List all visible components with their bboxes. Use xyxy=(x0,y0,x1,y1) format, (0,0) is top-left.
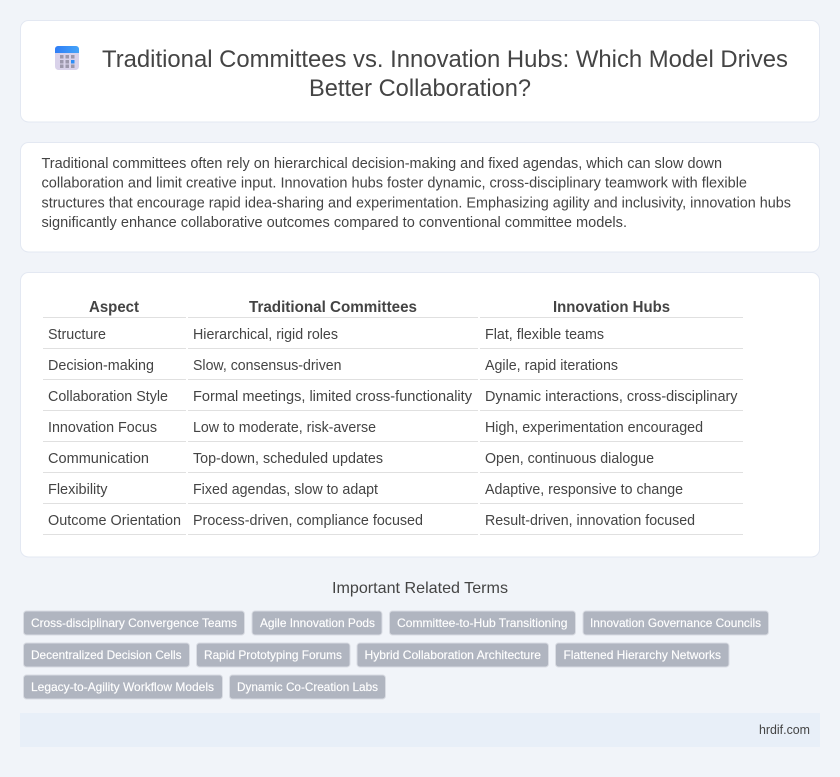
tag xyxy=(196,643,350,667)
tag: Dynamic Co-Creation Labs xyxy=(237,680,378,694)
table header xyxy=(89,299,670,316)
row: structure: Structure xyxy=(48,327,106,343)
table header: Aspect xyxy=(89,299,140,316)
row: decision-making: Slow, consensus-driven xyxy=(193,358,342,374)
tag xyxy=(24,611,244,635)
tag: Rapid Prototyping Forums xyxy=(204,648,342,662)
footer bar xyxy=(20,713,820,747)
tag xyxy=(390,611,576,635)
intro paragraph: structures that encourage rapid idea-sharing and experimentation. Emphasizing agility and inclusivity, innovation hubs xyxy=(42,194,791,212)
row: outcome orientation xyxy=(48,513,695,529)
row: innovation focus: High, experimentation encouraged xyxy=(485,420,703,436)
row: innovation focus: Innovation Focus xyxy=(48,420,157,436)
row: structure: Flat, flexible teams xyxy=(485,327,604,343)
title: Better Collaboration? xyxy=(309,75,531,102)
tag xyxy=(357,643,548,667)
tag: Legacy-to-Agility Workflow Models xyxy=(31,680,214,694)
tag: Flattened Hierarchy Networks xyxy=(564,648,721,662)
row: innovation focus: Low to moderate, risk-averse xyxy=(193,420,376,436)
icon: calendar xyxy=(55,46,79,70)
row: communication: Communication xyxy=(48,451,149,467)
tag xyxy=(556,643,729,667)
tag xyxy=(583,611,768,635)
row: flexibility: Adaptive, responsive to change xyxy=(485,482,683,498)
panel: comparison table xyxy=(20,272,820,557)
tag: Innovation Governance Councils xyxy=(590,616,761,630)
tag xyxy=(230,675,386,699)
row: innovation focus xyxy=(48,420,703,436)
footer source: hrdif.com xyxy=(759,722,810,737)
row: flexibility: Fixed agendas, slow to adapt xyxy=(193,482,378,498)
row: collaboration style: Dynamic interactions, cross-disciplinary xyxy=(485,389,738,405)
table header: Innovation Hubs xyxy=(553,299,670,316)
panel: introduction xyxy=(20,142,820,252)
row: structure xyxy=(48,327,604,343)
tag: Hybrid Collaboration Architecture xyxy=(364,648,541,662)
row: outcome orientation: Process-driven, compliance focused xyxy=(193,513,423,529)
panel: title card xyxy=(20,20,820,122)
row: decision-making: Decision-making xyxy=(48,358,154,374)
row: collaboration style: Collaboration Style xyxy=(48,389,168,405)
row: outcome orientation: Result-driven, innovation focused xyxy=(485,513,695,529)
row: decision-making xyxy=(48,358,618,374)
tag xyxy=(252,611,382,635)
tag: Agile Innovation Pods xyxy=(260,616,375,630)
tag xyxy=(24,675,222,699)
row: flexibility: Flexibility xyxy=(48,482,108,498)
row: flexibility xyxy=(48,482,683,498)
row: communication: Top-down, scheduled updates xyxy=(193,451,383,467)
tag: Cross-disciplinary Convergence Teams xyxy=(31,616,237,630)
tag xyxy=(24,643,190,667)
row: collaboration style: Formal meetings, limited cross-functionality xyxy=(193,389,473,405)
row: communication: Open, continuous dialogue xyxy=(485,451,654,467)
intro paragraph: Traditional committees often rely on hierarchical decision-making and fixed agendas, which can slow down xyxy=(42,155,722,172)
panel: related term tags xyxy=(24,611,768,699)
row: communication xyxy=(48,451,654,467)
intro paragraph: significantly enhance collaborative outcomes compared to conventional committee models. xyxy=(42,214,627,231)
tag: Committee-to-Hub Transitioning xyxy=(397,616,568,630)
title: Traditional Committees vs. Innovation Hubs: Which Model Drives xyxy=(102,46,788,73)
row: structure: Hierarchical, rigid roles xyxy=(193,327,338,343)
row: collaboration style xyxy=(48,389,738,405)
row: outcome orientation: Outcome Orientation xyxy=(48,513,181,529)
row: decision-making: Agile, rapid iterations xyxy=(485,358,618,374)
intro paragraph xyxy=(42,155,791,231)
heading: important related terms: Important Related Terms xyxy=(332,580,508,597)
tag: Decentralized Decision Cells xyxy=(31,648,182,662)
table header: Traditional Committees xyxy=(249,299,417,316)
title xyxy=(102,46,788,102)
intro paragraph: collaboration and limit creative input. Innovation hubs foster dynamic, cross-disciplinary teamwork with flexible xyxy=(42,174,747,192)
